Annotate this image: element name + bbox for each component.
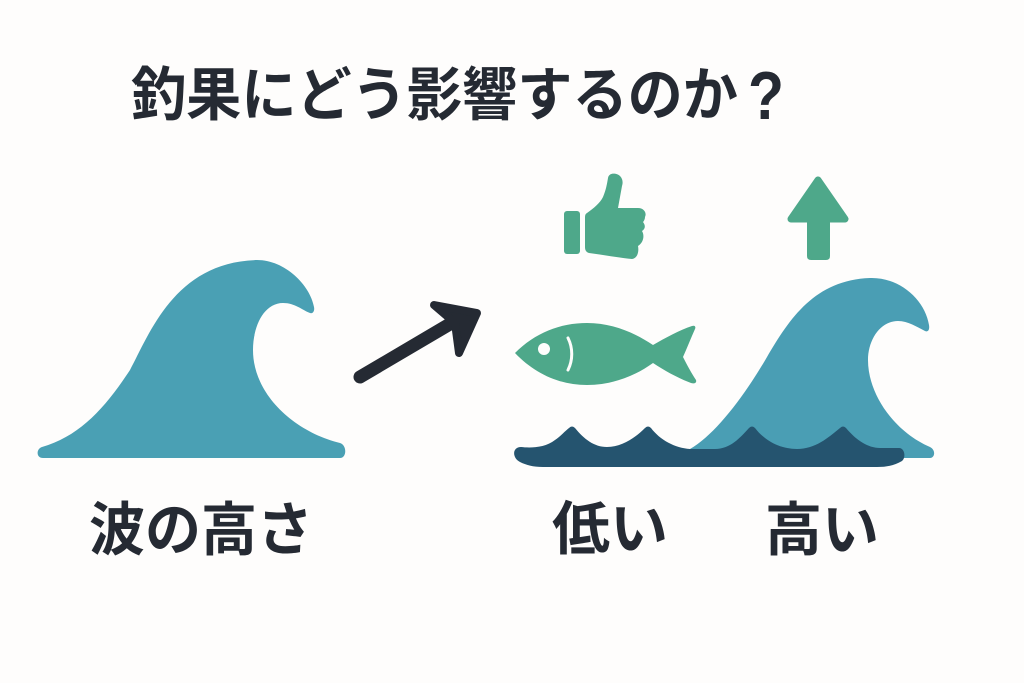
icon: up arrow [791,180,845,260]
label: wave height: 波の高さ [89,498,313,563]
arrow: diagonal [360,305,477,377]
label: low: 低い [552,497,668,562]
label: high: 高い [765,498,879,563]
title: ? [748,58,784,134]
icon: tall wave [690,278,934,458]
title: 釣果にどう影響するのか [131,63,738,128]
icon: large wave [38,260,345,458]
icon: dark water [514,426,904,467]
icon: thumbs up [564,174,646,259]
icon: fish [515,323,696,385]
